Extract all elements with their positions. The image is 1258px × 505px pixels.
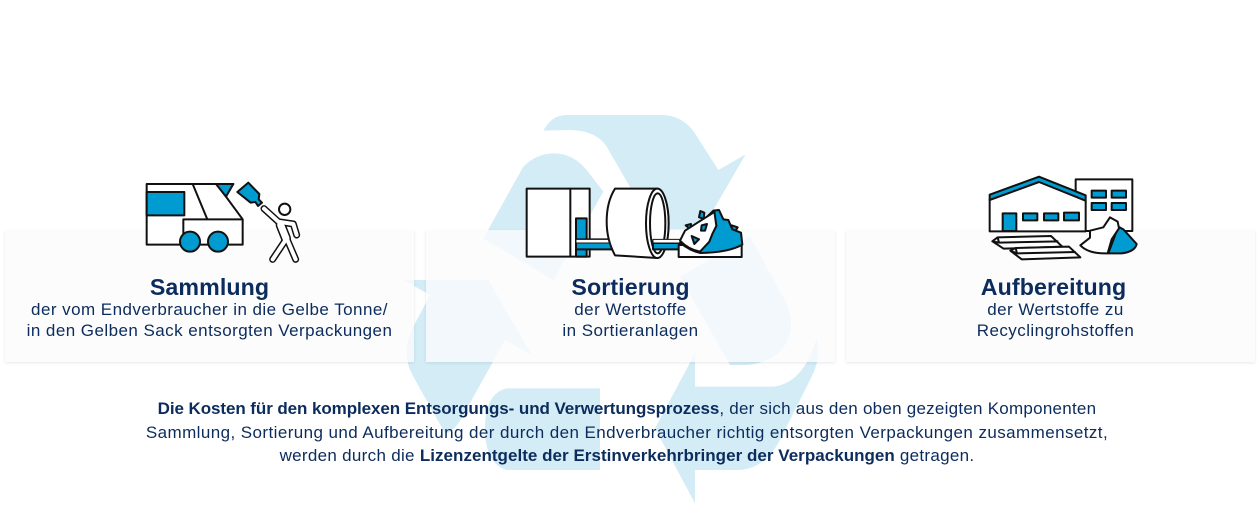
icon: collection truck and person throwing bottle — [146, 182, 300, 263]
text: Aufbereitung description: Recyclingrohstoffen — [977, 321, 1134, 340]
panel: Sammlung — [5, 230, 414, 362]
text block: cost explanation: Sammlung, Sortierung und Aufbereitung der durch den Endverbraucher richtig entsorgten Verpackungen zusammensetzt, — [146, 423, 1108, 442]
text block: cost explanation: Die Kosten für den komplexen Entsorgungs- und Verwertungsprozess, der sich aus den oben gezeigten Komponenten — [158, 399, 1096, 418]
text: Sortierung description: in Sortieranlagen — [562, 321, 699, 340]
text: Sammlung description: in den Gelben Sack entsorgten Verpackungen — [27, 321, 392, 340]
heading: Aufbereitung: Aufbereitung — [981, 274, 1126, 300]
text: Aufbereitung description — [977, 300, 1134, 340]
text: Sammlung description — [27, 300, 392, 340]
icon: recycling plant with material stacks and pile — [988, 176, 1138, 260]
text block: cost explanation: werden durch die Lizenzentgelte der Erstinverkehrbringer der Verpackungen getragen. — [280, 446, 974, 465]
heading: Sammlung: Sammlung — [150, 274, 269, 300]
text: Sammlung description: der vom Endverbraucher in die Gelbe Tonne/ — [31, 300, 388, 319]
panel: Aufbereitung — [846, 230, 1255, 362]
panel: Sortierung — [426, 230, 835, 362]
heading: Sortierung: Sortierung — [571, 274, 690, 300]
text: Sortierung description — [562, 300, 699, 340]
icon: sorting plant with drum and waste pile — [526, 188, 744, 259]
text: Sortierung description: der Wertstoffe — [574, 300, 687, 319]
text block: cost explanation — [146, 399, 1108, 465]
text: Aufbereitung description: der Wertstoffe zu — [987, 300, 1124, 319]
